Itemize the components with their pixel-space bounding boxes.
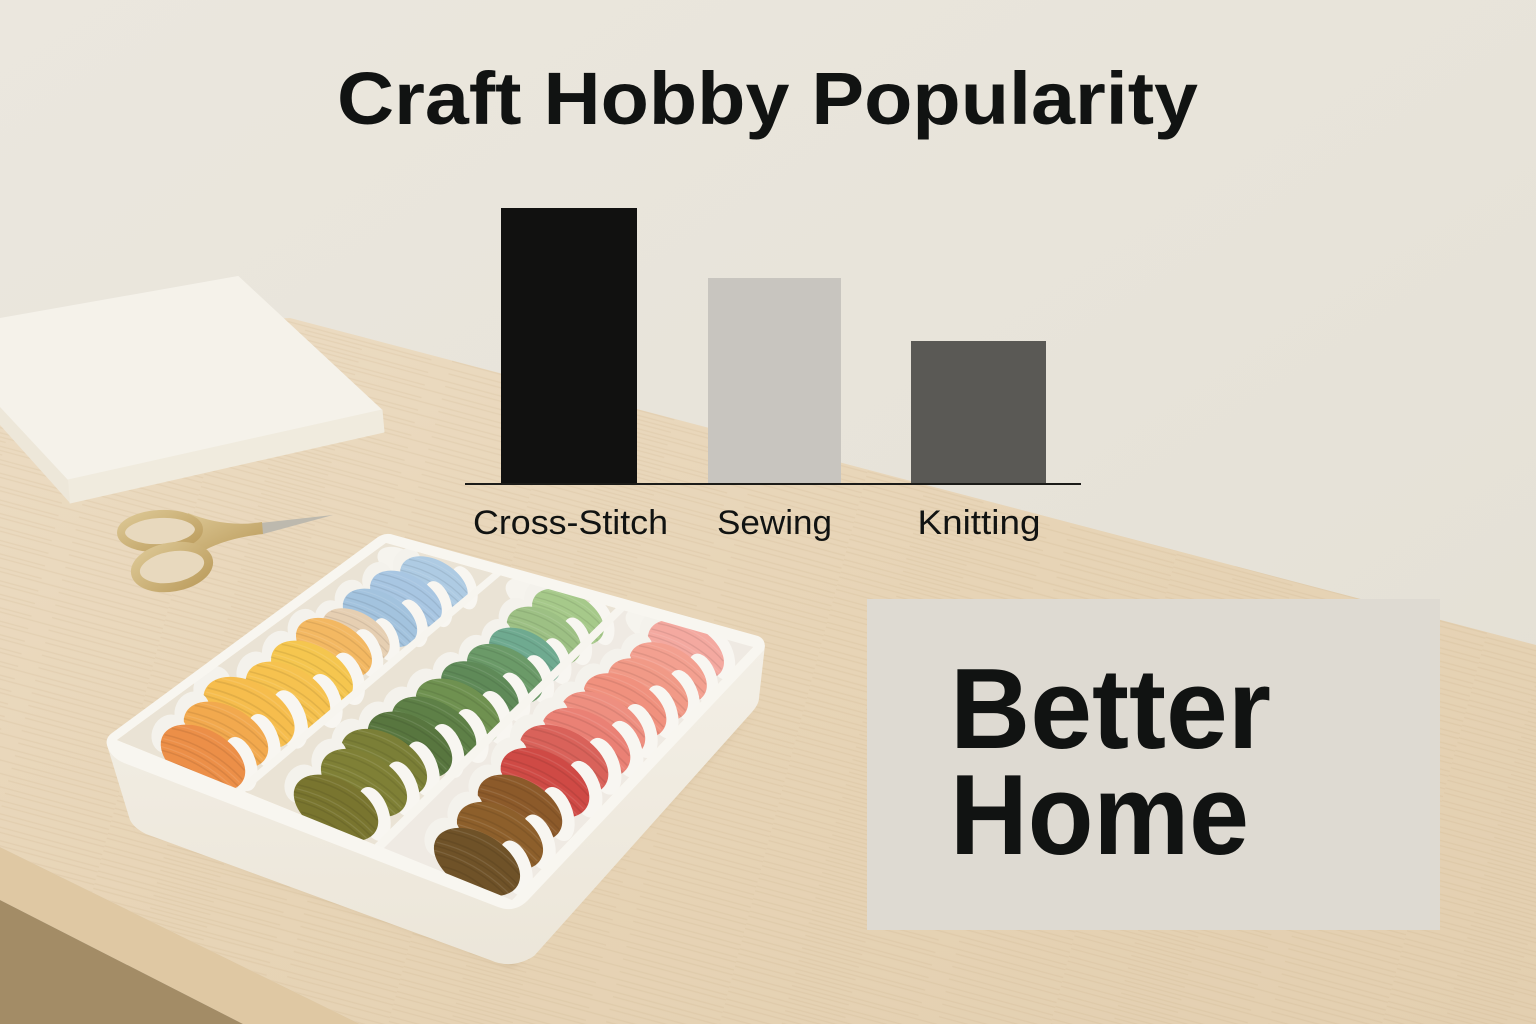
brand panel xyxy=(867,599,1440,930)
compartment 2: green threads xyxy=(278,575,620,855)
label: Sewing: Sewing xyxy=(717,504,832,542)
axis line xyxy=(465,483,1081,485)
tray shadow xyxy=(132,706,758,966)
label: Cross-Stitch: Cross-Stitch xyxy=(473,504,668,542)
brand name: Better xyxy=(950,646,1271,773)
compartment 1: warm threads xyxy=(145,544,483,805)
compartment 3: red and brown threads xyxy=(418,606,741,910)
brand name: Home xyxy=(950,752,1249,879)
empty cards at back of compartments xyxy=(372,540,680,650)
white canvas board xyxy=(0,277,384,503)
bar: Cross-Stitch xyxy=(501,208,637,484)
title: Craft Hobby Popularity xyxy=(337,57,1198,140)
label: Knitting: Knitting xyxy=(918,504,1040,542)
tray dividers xyxy=(231,567,631,851)
thread storage tray xyxy=(107,534,765,966)
tray top rim xyxy=(107,534,765,909)
bar: Knitting xyxy=(911,341,1046,484)
tray inner floor xyxy=(117,543,753,900)
tray front and side walls xyxy=(107,645,765,964)
compartment 3 floor xyxy=(375,603,753,900)
wooden desk xyxy=(0,318,1536,1024)
bar chart xyxy=(465,208,1081,542)
gold scissors xyxy=(120,512,333,593)
bar: Sewing xyxy=(708,278,841,484)
